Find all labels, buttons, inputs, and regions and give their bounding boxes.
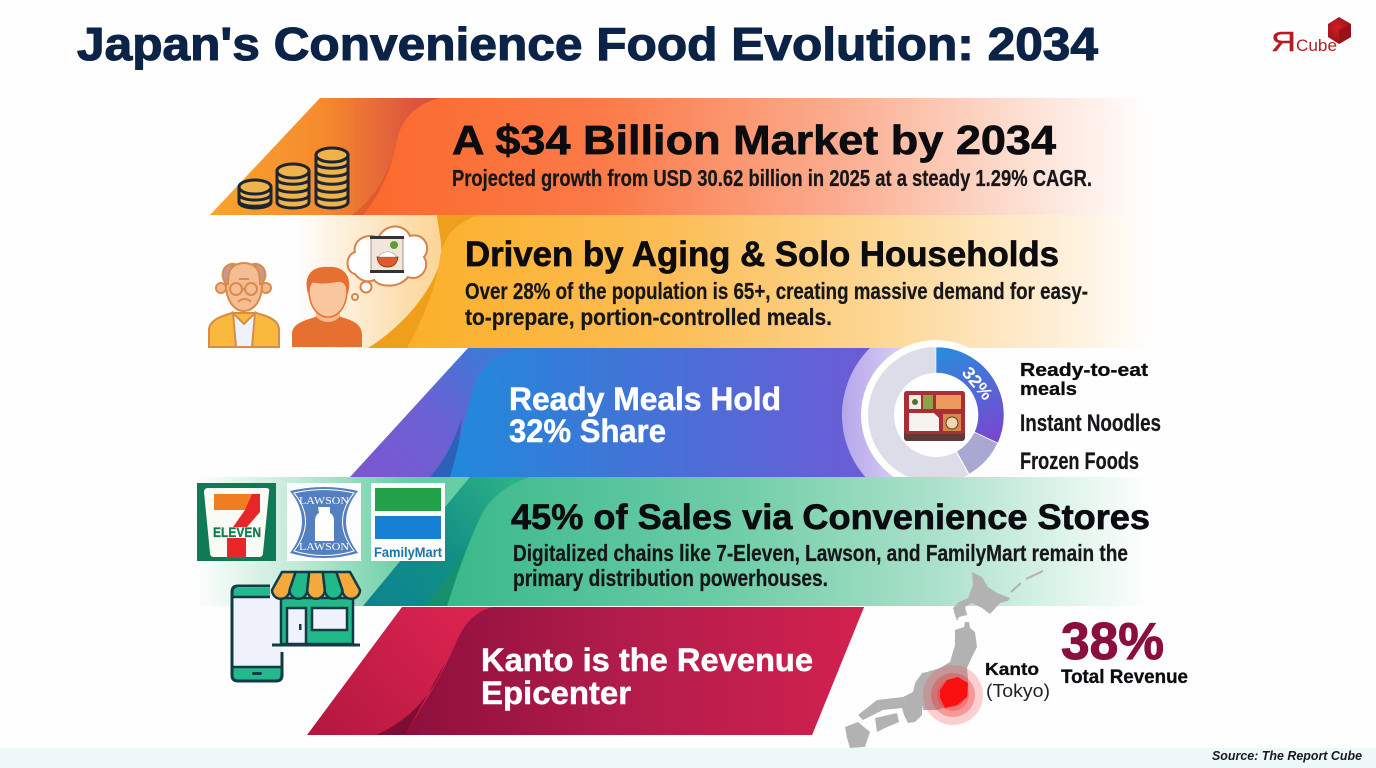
panel: ready meals: [350, 340, 1160, 477]
legend: Frozen Foods: [1020, 448, 1139, 475]
icon: coin stacks: [239, 148, 348, 208]
logo: RCube: Cube: [1296, 36, 1337, 55]
logo: FamilyMart: [371, 483, 445, 561]
logo: Lawson: LAWSON: [299, 542, 349, 553]
text: stores detail: Digitalized chains like 7-Eleven, Lawson, and FamilyMart remain the: [513, 540, 1128, 566]
panel: market size: [210, 98, 1150, 215]
chart label: 32%: 32%: [958, 363, 997, 404]
text: demographics detail: to-prepare, portion-controlled meals.: [465, 304, 832, 330]
legend: [1020, 360, 1161, 475]
icon: thought cloud with meal pack: [348, 226, 427, 300]
donut chart: [842, 340, 1004, 477]
panel: demographics: [209, 215, 1150, 348]
heading: stores: 45% of Sales via Convenience Stores: [511, 498, 1150, 537]
text: demographics detail: Over 28% of the population is 65+, creating massive demand for easy-: [465, 278, 1088, 304]
map: Japan: [845, 571, 1043, 748]
icon: bento box: [904, 391, 965, 441]
heading: ready meals: Ready Meals Hold: [509, 381, 781, 417]
heading: Kanto: [481, 642, 813, 711]
heading: demographics: Driven by Aging & Solo Households: [465, 235, 1059, 274]
legend: Instant Noodles: [1020, 410, 1161, 437]
logo: RCube: [1271, 17, 1351, 57]
logo: Lawson: [287, 483, 361, 561]
label: Kanto (Tokyo): Kanto: [985, 659, 1039, 679]
icon: elderly man: [209, 263, 279, 347]
stat: 38% total revenue: 38%: [1061, 613, 1164, 671]
label: Kanto (Tokyo): (Tokyo): [986, 681, 1050, 701]
Kanto highlight: [923, 665, 983, 725]
text: market detail: Projected growth from USD 30.62 billion in 2025 at a steady 1.29% CAGR.: [452, 165, 1092, 191]
text: stores detail: [513, 540, 1128, 591]
footer strip: [0, 748, 1376, 768]
heading: ready meals: [509, 381, 781, 449]
stat: 38% total revenue: Total Revenue: [1061, 667, 1188, 688]
heading: Kanto: Kanto is the Revenue: [481, 642, 813, 678]
icon: solo person: [292, 267, 362, 347]
logo: FamilyMart: FamilyMart: [374, 545, 442, 560]
source note: Source: The Report Cube: [1212, 749, 1362, 763]
heading: market: A $34 Billion Market by 2034: [452, 117, 1056, 163]
label: Kanto (Tokyo): [985, 659, 1050, 701]
title: Japan's Convenience Food Evolution: 2034: [77, 18, 1098, 70]
logo: Lawson: LAWSON: [299, 496, 349, 507]
panel: convenience stores: [195, 477, 1150, 606]
heading: ready meals: 32% Share: [509, 413, 666, 449]
text: stores detail: primary distribution powerhouses.: [513, 565, 828, 591]
heading: Kanto: Epicenter: [481, 675, 631, 711]
legend: Ready-to-eat: [1020, 360, 1148, 380]
panel: Kanto revenue: [307, 607, 864, 735]
logo: 7-Eleven: ELEVEN: [213, 524, 261, 540]
text: demographics detail: [465, 278, 1088, 330]
logo: RCube: Я: [1271, 26, 1296, 57]
legend: meals: [1020, 379, 1077, 399]
icon: phone and shop: [232, 572, 360, 681]
stat: 38% total revenue: [1061, 613, 1188, 688]
logo: 7-Eleven: [197, 483, 276, 561]
